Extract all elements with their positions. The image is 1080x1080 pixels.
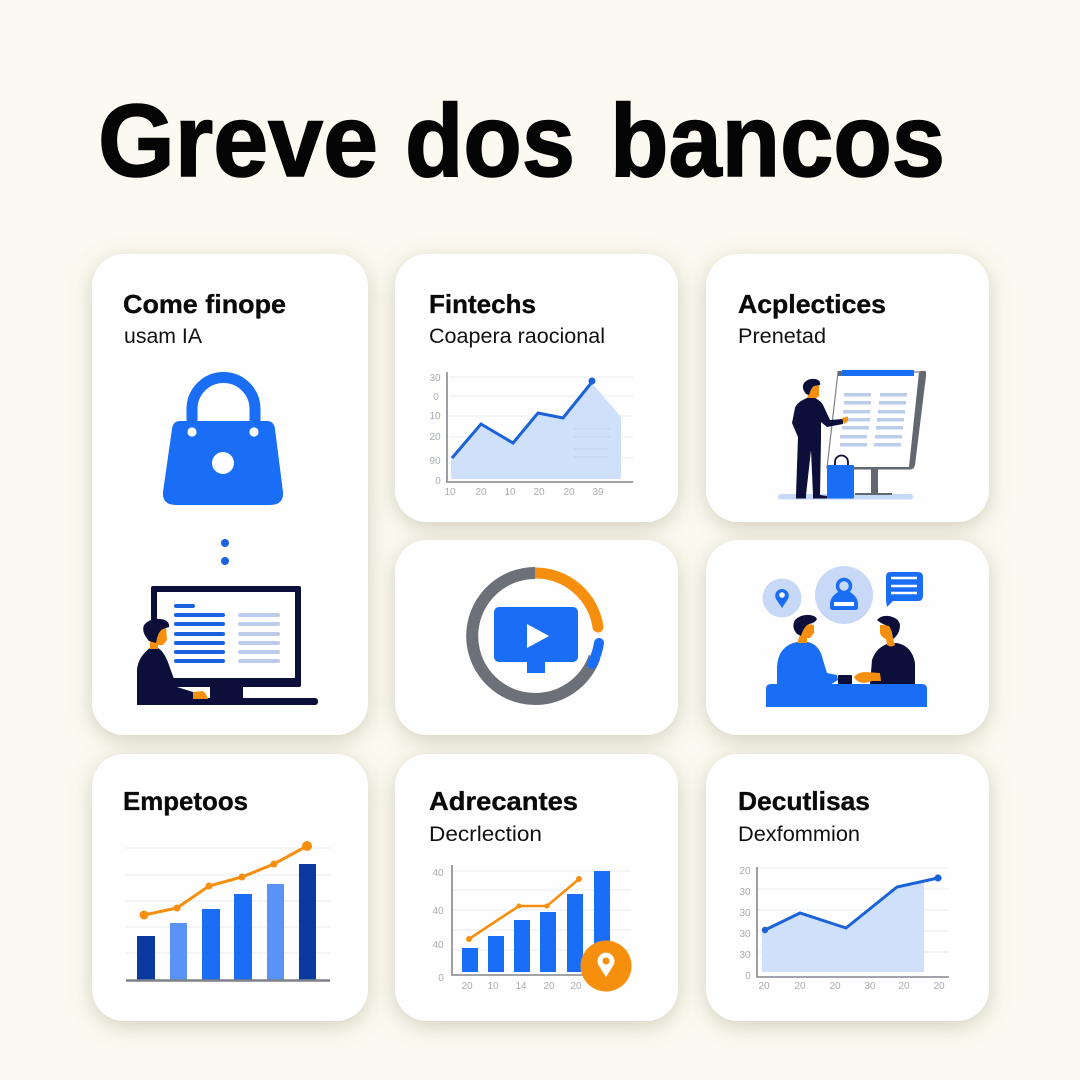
area chart: 90 <box>429 456 441 467</box>
bar and line chart: 20 <box>543 981 555 992</box>
icon: padlock <box>163 378 283 505</box>
icon: conversation <box>762 566 927 707</box>
subheading: Coapera raocional: Coapera raocional <box>429 325 605 348</box>
heading: Decutlisas: Decutlisas <box>738 786 870 816</box>
panel: conversation <box>706 540 989 735</box>
area chart: 20 <box>933 981 945 992</box>
panel: Empetoos <box>92 754 368 1021</box>
subheading: Decrlection: Decrlection <box>429 823 542 846</box>
bar and line chart: 40 <box>432 868 444 879</box>
icon: presenter at board <box>778 370 926 500</box>
title <box>98 83 945 198</box>
panel: Come finope <box>92 254 368 735</box>
area chart: 20 <box>533 487 545 498</box>
subheading: Prenetad: Prenetad <box>738 325 826 348</box>
area chart: 30 <box>429 373 441 384</box>
area chart <box>429 372 633 498</box>
area chart: 10 <box>504 487 516 498</box>
heading: Fintechs: Fintechs <box>429 289 536 319</box>
area chart: 20 <box>758 981 770 992</box>
subheading: Dexfommion: Dexfommion <box>738 823 860 846</box>
bar and line chart: 20 <box>570 981 582 992</box>
area chart: 39 <box>592 487 604 498</box>
area chart: 20 <box>739 866 751 877</box>
area chart: 10 <box>429 411 441 422</box>
panel: Fintechs <box>395 254 678 522</box>
bar and line chart: 20 <box>461 981 473 992</box>
heading: Adrecantes: Adrecantes <box>429 786 578 816</box>
bar and line chart: 40 <box>432 940 444 951</box>
area chart: 20 <box>794 981 806 992</box>
area chart <box>739 866 949 992</box>
subheading: usam IA: usam IA <box>124 325 202 348</box>
area chart: 20 <box>829 981 841 992</box>
icon: orange location badge <box>580 940 632 992</box>
title: Greve <box>98 83 378 198</box>
heading: Come finope: Come finope <box>123 289 286 319</box>
area chart: 20 <box>475 487 487 498</box>
icon: video ring <box>472 573 599 699</box>
heading: Empetoos: Empetoos <box>123 786 248 816</box>
area chart: 30 <box>864 981 876 992</box>
area chart: 20 <box>898 981 910 992</box>
bar and line chart <box>432 865 632 992</box>
panel: Adrecantes <box>395 754 678 1021</box>
title: dos <box>405 83 575 198</box>
area chart: 0 <box>745 971 751 982</box>
bar and line chart: 40 <box>432 906 444 917</box>
panel: Decutlisas <box>706 754 989 1021</box>
bar and line chart: 0 <box>438 973 444 984</box>
area chart: 30 <box>739 887 751 898</box>
area chart: 20 <box>429 432 441 443</box>
panel: video ring <box>395 540 678 735</box>
bar and line chart: 14 <box>515 981 527 992</box>
area chart: 10 <box>444 487 456 498</box>
icon: person at computer <box>137 586 318 705</box>
area chart: 0 <box>433 392 439 403</box>
area chart: 30 <box>739 929 751 940</box>
area chart: 30 <box>739 950 751 961</box>
panel: Acplectices <box>706 254 989 522</box>
bar and line chart <box>126 841 330 980</box>
area chart: 20 <box>563 487 575 498</box>
area chart: 30 <box>739 908 751 919</box>
bar and line chart: 10 <box>487 981 499 992</box>
title: bancos <box>610 83 945 198</box>
connector dots <box>221 539 229 565</box>
area chart: 0 <box>435 476 441 487</box>
heading: Acplectices: Acplectices <box>738 289 886 319</box>
